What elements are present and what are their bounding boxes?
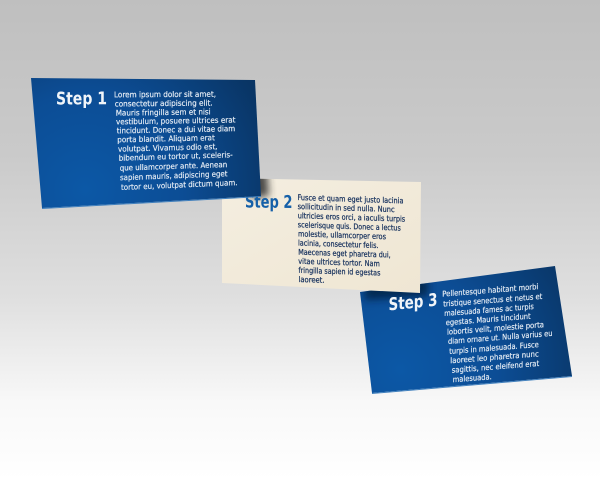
panel: step 1 (31, 78, 261, 209)
text block: step 2: Maecenas eget pharetra dui, (298, 248, 391, 260)
text block: step 2 (298, 193, 405, 285)
text block: step 3: Pellentesque habitant morbi (442, 282, 538, 299)
text block: step 2: lacinia, consectetur felis. (298, 239, 378, 250)
panel: step 3 (360, 266, 572, 394)
text block: step 1 (114, 90, 238, 192)
text block: step 2: sollicitudin in sed nulla. Nunc (298, 202, 395, 214)
text block: step 1: vestibulum, posuere ultrices erat (116, 115, 236, 126)
text block: step 1: sapien mauris, adipiscing eget (120, 169, 228, 182)
text block: step 2: Fusce et quam eget justo lacinia (298, 193, 404, 205)
heading: step 2: Step 2 (245, 193, 292, 213)
text block: step 2: ultricies eros orci, a iaculis turpis (298, 211, 405, 224)
text block: step 1: porta blandit. Aliquam erat (117, 133, 215, 144)
text block: step 3: diam ornare ut. Nulla varius eu (448, 329, 553, 346)
text block: step 3: malesuada. (453, 372, 492, 384)
text block: step 3: sagittis, nec eleifend erat (452, 359, 539, 375)
text block: step 2: vitae ultrices tortor. Nam (298, 257, 380, 268)
text block: step 3 (442, 282, 553, 384)
text block: step 3: lobortis velit, molestie porta (447, 320, 544, 337)
heading: step 3: Step 3 (388, 291, 438, 315)
text block: step 1: bibendum eu tortor ut, sceleris- (119, 150, 233, 163)
text block: step 1: tortor eu, volutpat dictum quam. (121, 178, 237, 192)
panel: step 2 (222, 172, 421, 293)
text block: step 1: consectetur adipiscing elit. (115, 99, 213, 108)
text block: step 3: tristique senectus et netus et (443, 292, 542, 309)
text block: step 2: molestie, ullamcorper eros (298, 229, 386, 241)
text block: step 1: Lorem ipsum dolor sit amet, (114, 90, 216, 99)
text block: step 2: laoreet. (298, 275, 324, 285)
text block: step 1: Mauris fringilla sem et nisi (116, 107, 211, 118)
text block: step 2: fringilla sapien id egestas (298, 266, 380, 277)
text block: step 3: egestas. Mauris tincidunt (446, 312, 531, 327)
text block: step 3: laoreet leo pharetra nunc (450, 349, 539, 365)
text block: step 1: volutpat. Vivamus odio est, (118, 142, 218, 154)
text block: step 3: turpis in malesuada. Fusce (449, 340, 539, 356)
text block: step 3: malesuada fames ac turpis (444, 302, 534, 318)
text block: step 1: tincidunt. Donec a dui vitae diam (117, 124, 235, 135)
heading: step 1: Step 1 (56, 89, 107, 109)
text block: step 2: scelerisque quis. Donec a lectus (298, 220, 401, 233)
text block: step 1: que ullamcorper ante. Aenean (120, 160, 227, 173)
